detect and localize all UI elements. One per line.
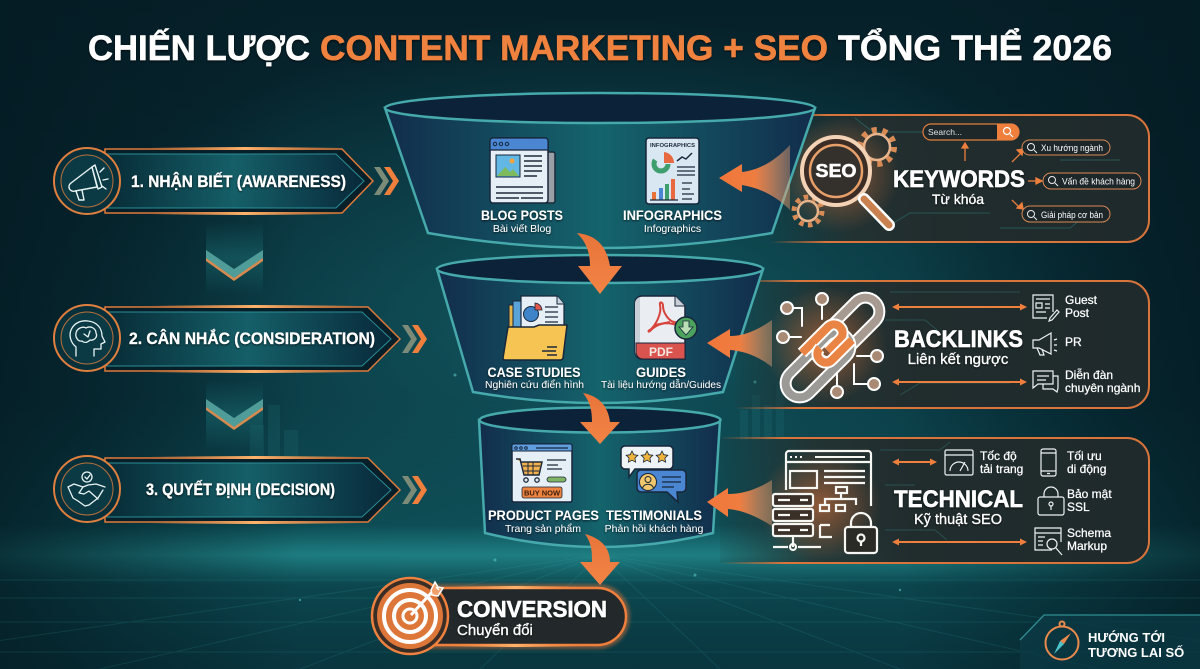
title: CHIẾN LƯỢC [88, 28, 310, 68]
speed label: tải trang [980, 462, 1023, 476]
technical label [894, 486, 1023, 528]
icon: forum chat [1033, 371, 1058, 392]
keyword arrows [962, 143, 1042, 209]
blog posts label: Bài viết Blog [493, 223, 551, 235]
stage 2: consideration [54, 305, 427, 373]
keywords label: Từ khóa [932, 191, 984, 207]
infographics label [623, 207, 722, 235]
technical label: Kỹ thuật SEO [914, 511, 1002, 528]
footer text: TƯƠNG LAI SỐ [1088, 645, 1184, 660]
icon: schema markup [1035, 528, 1062, 555]
product pages label: PRODUCT PAGES [488, 508, 599, 523]
icon: product pages: BUY NOW [524, 488, 561, 498]
icon: chain link [777, 292, 885, 403]
product pages label [488, 508, 599, 535]
arrow: funnel 1 to funnel 2 [577, 233, 622, 294]
connector chevron 2 [206, 380, 263, 450]
title: CONTENT MARKETING + SEO [320, 29, 828, 68]
keyword pill: xu hướng ngành: Xu hướng ngành [1041, 143, 1103, 154]
keywords label: KEYWORDS [893, 166, 1025, 193]
icon: compass [1046, 622, 1078, 660]
icon: guest post [1033, 295, 1059, 321]
icon: pdf guides: PDF [649, 345, 673, 359]
footer text: HƯỚNG TỚI [1088, 630, 1165, 645]
icon: speed gauge [945, 450, 973, 475]
arrow: forum [892, 378, 1027, 386]
forum label: Diễn đàn [1065, 367, 1113, 382]
testimonials label: TESTIMONIALS [606, 508, 702, 523]
mobile label: Tối ưu [1067, 449, 1102, 463]
technical label: TECHNICAL [894, 486, 1023, 513]
backlinks label [894, 326, 1023, 368]
chevrons [402, 325, 427, 353]
chevrons [402, 476, 427, 504]
icon: infographics: INFOGRAPHICS [650, 143, 695, 149]
product pages label: Trang sản phẩm [505, 523, 581, 535]
case studies label: CASE STUDIES [488, 365, 580, 380]
guest post label: Post [1065, 306, 1090, 320]
case studies label [485, 365, 584, 391]
icon: testimonials [621, 446, 686, 502]
arrow: technical to funnel [707, 480, 772, 526]
testimonials label [605, 508, 703, 535]
title: TỔNG THỂ 2026 [838, 28, 1112, 68]
keyword pill: xu hướng ngành [1022, 140, 1110, 155]
stage 2: consideration: 2. CÂN NHẮC (CONSIDERATION) [129, 329, 375, 348]
conversion label [457, 596, 607, 639]
guest post label: Guest [1065, 293, 1098, 307]
panel: backlinks [735, 281, 1149, 408]
icon: megaphone [69, 165, 108, 200]
funnel 1 [385, 93, 815, 248]
arrow: guest post [892, 304, 1027, 310]
testimonials label: Phản hồi khách hàng [605, 523, 703, 535]
keyword pill: giải pháp cơ bản [1022, 206, 1110, 222]
schema label: Schema [1067, 526, 1111, 540]
arrow: schema [892, 538, 1027, 546]
icon: pdf guides [635, 296, 697, 359]
funnel 2 [437, 255, 763, 403]
blog posts label: BLOG POSTS [481, 207, 563, 223]
funnel 3 [479, 408, 720, 547]
infographics label: INFOGRAPHICS [623, 207, 722, 223]
conversion label: Chuyển đổi [457, 622, 533, 639]
icon: brain head [70, 321, 105, 356]
icon: product pages [512, 444, 572, 502]
guides label: GUIDES [636, 365, 686, 380]
icon: handshake [68, 472, 105, 506]
arrow: funnel 2 to funnel 3 [580, 393, 620, 444]
guides label: Tài liệu hướng dẫn/Guides [601, 378, 721, 391]
ssl label: Bảo mật [1067, 487, 1112, 501]
mobile label: di động [1067, 462, 1106, 476]
keyword pill: vấn đề khách hàng [1043, 173, 1141, 189]
icon: website, server and lock [773, 451, 877, 553]
conversion badge [372, 578, 630, 654]
blog posts label [481, 207, 563, 235]
icon: SEO magnifier with gears [794, 130, 894, 225]
icon: infographics [646, 138, 699, 204]
case studies label: Nghiên cứu điển hình [485, 379, 584, 391]
stage 1: awareness: 1. NHẬN BIẾT (AWARENESS) [131, 172, 346, 191]
search box [923, 124, 1019, 140]
infographics label: Infographics [644, 223, 701, 235]
chevrons [374, 167, 399, 195]
stage 3: decision [54, 456, 427, 524]
icon: case studies [503, 296, 567, 360]
icon: phone [1041, 449, 1056, 476]
icon: PR megaphone [1033, 333, 1057, 355]
arrow: backlinks to funnel [707, 320, 772, 367]
icon: ssl lock [1038, 487, 1064, 515]
search box: Search... [928, 127, 962, 137]
guides label [601, 365, 721, 391]
speed label: Tốc độ [980, 449, 1017, 463]
keywords label [893, 166, 1025, 207]
keyword pill: giải pháp cơ bản: Giải pháp cơ bản [1041, 210, 1103, 221]
conversion label: CONVERSION [457, 596, 607, 622]
forum label: chuyên ngành [1065, 381, 1140, 395]
stage 3: decision: 3. QUYẾT ĐỊNH (DECISION) [146, 480, 335, 499]
schema label: Markup [1067, 539, 1107, 553]
icon: SEO magnifier with gears: SEO [816, 161, 856, 181]
stage 1: awareness [54, 147, 399, 215]
backlinks label: Liên kết ngược [908, 351, 1009, 368]
footer badge [1020, 615, 1200, 669]
backlinks label: BACKLINKS [894, 326, 1023, 353]
panel: technical [720, 438, 1149, 563]
arrow: keywords to funnel [719, 145, 790, 210]
icon: blog posts [490, 138, 555, 203]
arrow: funnel 3 to conversion [580, 534, 620, 585]
connector chevron 1 [206, 222, 263, 294]
panel: keywords [770, 115, 1149, 242]
PR label: PR [1065, 335, 1082, 349]
keyword pill: vấn đề khách hàng: Vấn đề khách hàng [1062, 176, 1135, 188]
icon: target [372, 578, 448, 654]
ssl label: SSL [1067, 500, 1090, 514]
title [88, 28, 1112, 68]
arrow: speed [892, 458, 937, 466]
